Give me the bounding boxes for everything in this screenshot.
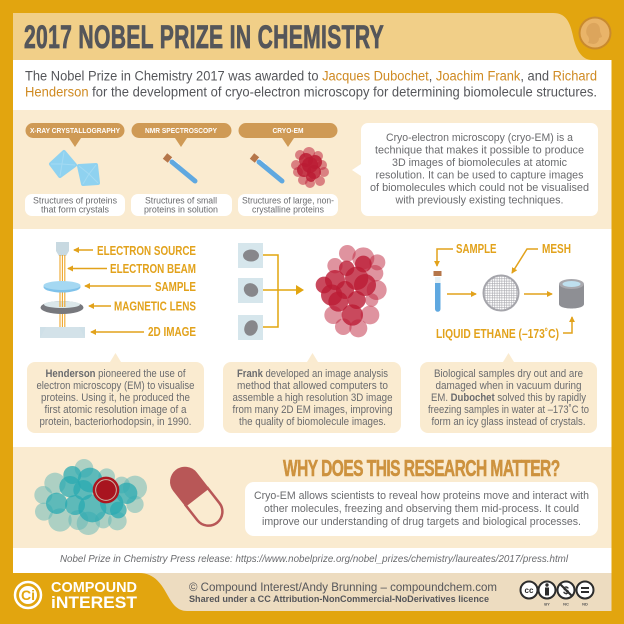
- label: liquid ethane: LIQUID ETHANE (–173˚C): [436, 327, 559, 341]
- text: henderson: [27, 353, 204, 433]
- icon: creative commons licence: BY: [544, 602, 550, 606]
- label: magnetic lens: [89, 300, 196, 314]
- logo: compound interest: COMPOUND: [51, 579, 137, 596]
- header band: [13, 13, 592, 60]
- nmr spectroscopy column: Structures of small: [145, 196, 217, 206]
- text: henderson: first atomic resolution image of a: [44, 404, 187, 416]
- cryo-em column: crystalline proteins: [252, 204, 325, 214]
- icon: creative commons licence: $: [563, 585, 569, 597]
- icon: creative commons licence: [520, 582, 594, 606]
- x-ray crystallography column: [25, 123, 125, 216]
- cryo-em column: Structures of large, non-: [242, 196, 334, 206]
- label: electron beam: [68, 262, 196, 276]
- text: frank: Frank developed an image analysis: [237, 368, 388, 380]
- diagram: electron microscope: [40, 242, 85, 338]
- source line: Nobel Prize in Chemistry Press release: https://www.nobelprize.org/nobel_prizes/chemistry/laureates/2017/press.html: [60, 553, 569, 565]
- cryo-em column: [238, 123, 338, 216]
- label: sample: [437, 242, 496, 266]
- icon: creative commons licence: cc: [525, 586, 534, 595]
- icon: nobel medal: [578, 16, 612, 50]
- text: why it matters: [245, 482, 598, 536]
- footer band: [139, 573, 612, 611]
- nmr spectroscopy column: proteins in solution: [144, 204, 218, 214]
- icon: creative commons licence: NC: [563, 602, 569, 606]
- x-ray crystallography column: Structures of proteins: [33, 196, 118, 206]
- text: frank: [223, 353, 401, 433]
- credit: [189, 580, 497, 605]
- label: electron source: [74, 244, 196, 258]
- panel: why it matters: [13, 447, 612, 548]
- logo: compound interest: [15, 579, 137, 612]
- diagram: 2d images to 3d model: [238, 243, 387, 340]
- logo: compound interest: Ci: [21, 587, 35, 603]
- label: liquid ethane: [436, 317, 572, 341]
- panel: techniques: [13, 110, 612, 229]
- text: frank: the quality of biomolecule images.: [239, 416, 386, 428]
- source line: [13, 548, 612, 573]
- text: why it matters: other molecules, freezing and observing them mid-process. It could: [264, 503, 579, 515]
- text: henderson: electron microscopy (EM) to visualise: [36, 380, 195, 392]
- credit: Shared under a CC Attribution-NonCommercial-NoDerivatives licence: [189, 594, 489, 605]
- intro panel: The Nobel Prize in Chemistry 2017 was awarded to Jacques Dubochet, Joachim Frank, and Richard: [25, 68, 597, 84]
- label: 2d image: [91, 325, 196, 339]
- text: dubochet: Biological samples dry out and are: [434, 368, 583, 380]
- text: frank: from many 2D EM images, improving: [232, 404, 393, 416]
- text: henderson: protein, bacteriorhodopsin, in 1990.: [40, 416, 192, 428]
- text: dubochet: freezing samples in water at –173˚C to: [428, 404, 589, 416]
- heading: why does this research matter: WHY DOES THIS RESEARCH MATTER?: [283, 456, 560, 482]
- logo: compound interest: iNTEREST: [51, 594, 137, 612]
- text: henderson: proteins. Using it, he produced the: [41, 392, 190, 404]
- nmr spectroscopy column: [131, 123, 232, 216]
- callout: cryo-em definition: [352, 123, 598, 216]
- label: electron source: ELECTRON SOURCE: [97, 244, 196, 258]
- x-ray crystallography column: that form crystals: [41, 204, 110, 214]
- label: sample: [85, 280, 196, 294]
- callout: cryo-em definition: with previously existing techniques.: [395, 194, 564, 206]
- panel: methods background: [13, 229, 612, 447]
- label: mesh: MESH: [542, 242, 571, 256]
- icon: protein with drug binding site: [34, 459, 147, 535]
- text: dubochet: form an icy glass instead of crystals.: [432, 416, 586, 428]
- cryo-em column: CRYO-EM: [272, 126, 304, 135]
- text: henderson: Henderson pioneered the use of: [46, 368, 186, 380]
- text: why it matters: Cryo-EM allows scientists to reveal how proteins move and interact with: [254, 490, 589, 502]
- callout: cryo-em definition: technique that makes it possible to produce: [375, 145, 584, 157]
- text: frank: method that allowed computers to: [237, 380, 388, 392]
- text: dubochet: damaged when in vacuum during: [436, 380, 582, 392]
- text: dubochet: EM. Dubochet solved this by rapidly: [431, 392, 587, 404]
- text: why it matters: improve our understanding of drug targets and biological processes.: [262, 516, 581, 528]
- label: electron beam: ELECTRON BEAM: [110, 262, 196, 276]
- diagram: vitrification: [434, 271, 584, 312]
- intro panel: Henderson for the development of cryo-electron microscopy for determining biomolecule structures.: [25, 84, 597, 100]
- text: dubochet: [420, 353, 597, 433]
- label: sample: SAMPLE: [155, 280, 196, 294]
- intro panel: [13, 60, 612, 110]
- nmr spectroscopy column: NMR SPECTROSCOPY: [145, 126, 217, 135]
- label: sample: SAMPLE: [456, 242, 496, 256]
- label: mesh: [512, 242, 571, 273]
- callout: cryo-em definition: 3D images of biomolecules at atomic: [392, 157, 567, 169]
- icon: drug capsule: [164, 461, 229, 532]
- text: frank: assemble a high resolution 3D image: [232, 392, 393, 404]
- label: magnetic lens: MAGNETIC LENS: [114, 300, 196, 314]
- label: 2d image: 2D IMAGE: [148, 325, 196, 339]
- title: 2017 NOBEL PRIZE IN CHEMISTRY: [24, 18, 384, 55]
- icon: creative commons licence: ND: [582, 602, 588, 606]
- callout: cryo-em definition: Cryo-electron microscopy (cryo-EM) is a: [386, 132, 574, 144]
- callout: cryo-em definition: resolution. It can be used to capture images: [376, 170, 584, 182]
- credit: © Compound Interest/Andy Brunning – compoundchem.com: [189, 580, 497, 594]
- callout: cryo-em definition: of biomolecules which could not be visualised: [370, 182, 589, 194]
- x-ray crystallography column: X-RAY CRYSTALLOGRAPHY: [30, 126, 120, 135]
